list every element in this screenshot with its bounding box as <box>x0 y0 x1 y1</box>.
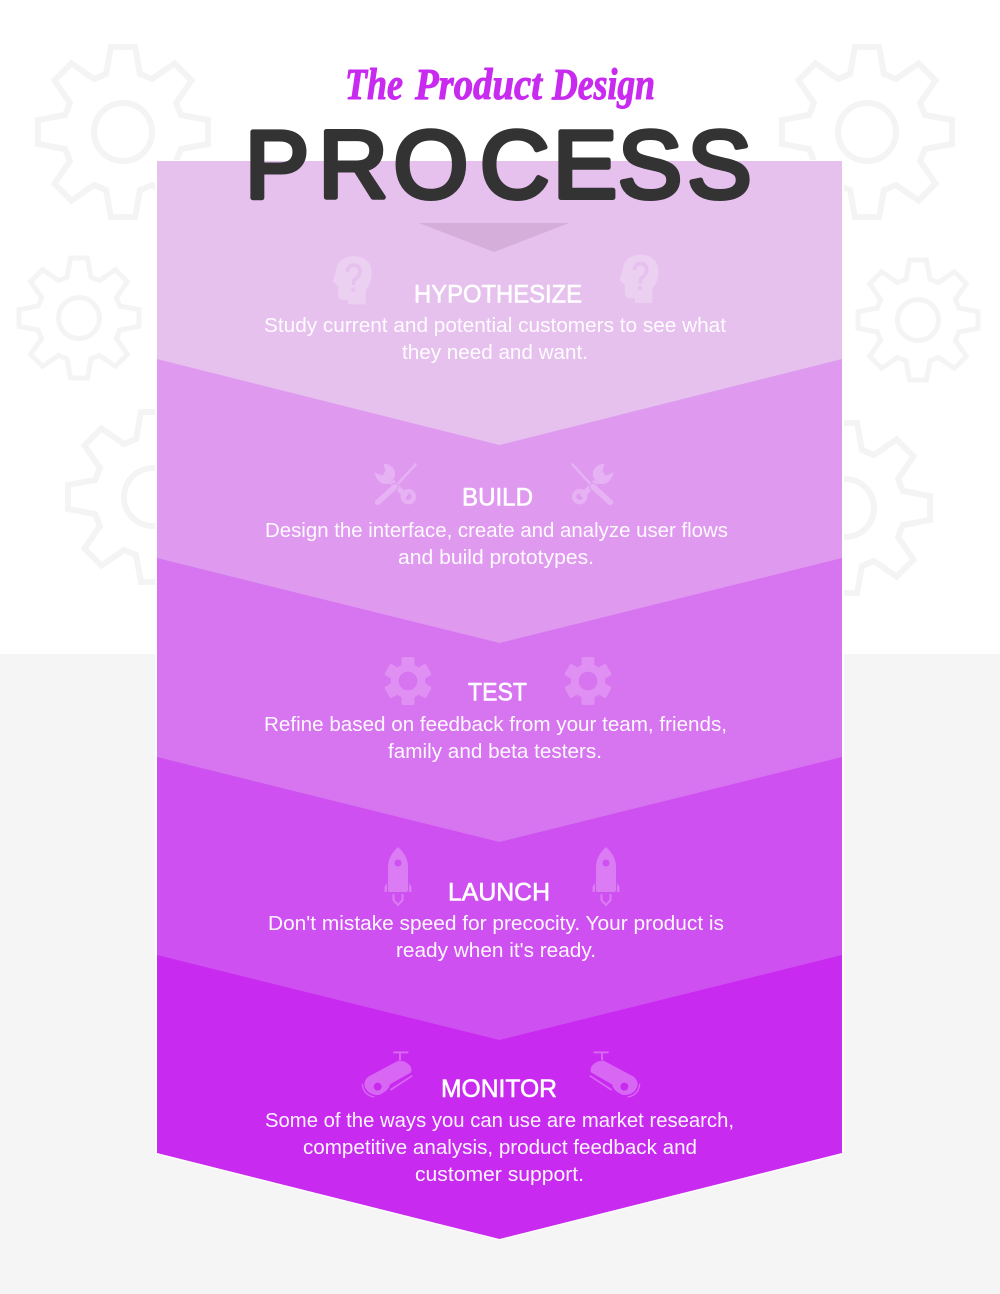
decorative gear: lower right <box>760 423 930 593</box>
heading: launch: LAUNCH <box>448 878 550 906</box>
icon: head with question mark, right <box>619 254 658 303</box>
panel: monitor chevron <box>157 900 842 1239</box>
decorative gear: top left <box>38 47 208 217</box>
step: hypothesize <box>264 254 726 364</box>
heading: build: BUILD <box>462 484 533 512</box>
icon: rocket, left <box>384 847 412 905</box>
decorative gear: lower left <box>68 412 238 582</box>
description: monitor <box>265 1109 734 1186</box>
panel: build chevron <box>157 300 842 643</box>
description: monitor: competitive analysis, product feedback and <box>303 1136 697 1159</box>
title script line: Design <box>551 60 655 109</box>
description: test: Refine based on feedback from your team, friends, <box>264 713 727 736</box>
background: grey lower band <box>0 654 1000 1294</box>
icon: gear, left <box>384 657 432 705</box>
description: monitor: Some of the ways you can use are market research, <box>265 1109 734 1132</box>
title script line: Product <box>414 60 544 109</box>
panel: white halo around chevron stack <box>155 160 844 1240</box>
icon: crossed tools, right <box>572 464 614 502</box>
heading: monitor: MONITOR <box>441 1075 557 1103</box>
description: build: Design the interface, create and analyze user flows <box>265 519 728 542</box>
icon: rocket, right <box>592 847 620 905</box>
description: hypothesize: Study current and potential customers to see what <box>264 314 726 337</box>
panel: launch chevron <box>157 700 842 1040</box>
step: launch <box>268 847 724 962</box>
description: launch <box>268 912 724 962</box>
description: build <box>265 519 728 569</box>
description: hypothesize: they need and want. <box>402 341 588 364</box>
step: monitor <box>265 1052 734 1186</box>
icon: security camera, right <box>590 1052 640 1097</box>
title main word: PROCESS <box>245 112 752 218</box>
arrow: small shadow triangle under title <box>419 223 569 252</box>
description: test <box>264 713 727 763</box>
description: monitor: customer support. <box>415 1163 584 1186</box>
background: white upper area <box>0 0 1000 654</box>
description: launch: Don't mistake speed for precocity. Your product is <box>268 912 724 935</box>
decorative gear: middle right <box>858 260 978 380</box>
panel: hypothesize chevron <box>157 161 842 445</box>
title script line: The <box>345 60 403 109</box>
title script line <box>345 60 655 109</box>
icon: crossed tools, left <box>374 464 416 502</box>
decorative gear: top right <box>782 47 952 217</box>
icon: gear, right <box>564 657 612 705</box>
description: build: and build prototypes. <box>398 546 594 569</box>
step: build <box>265 464 728 569</box>
icon: security camera, left <box>362 1052 412 1097</box>
step: test <box>264 657 727 763</box>
icon: head with question mark, left <box>333 256 372 304</box>
description: test: family and beta testers. <box>388 740 602 763</box>
heading: hypothesize: HYPOTHESIZE <box>414 280 582 308</box>
panel: test chevron <box>157 500 842 842</box>
description: hypothesize <box>264 314 726 364</box>
decorative gear: middle left <box>19 258 139 378</box>
description: launch: ready when it's ready. <box>396 939 596 962</box>
heading: test: TEST <box>468 678 527 706</box>
